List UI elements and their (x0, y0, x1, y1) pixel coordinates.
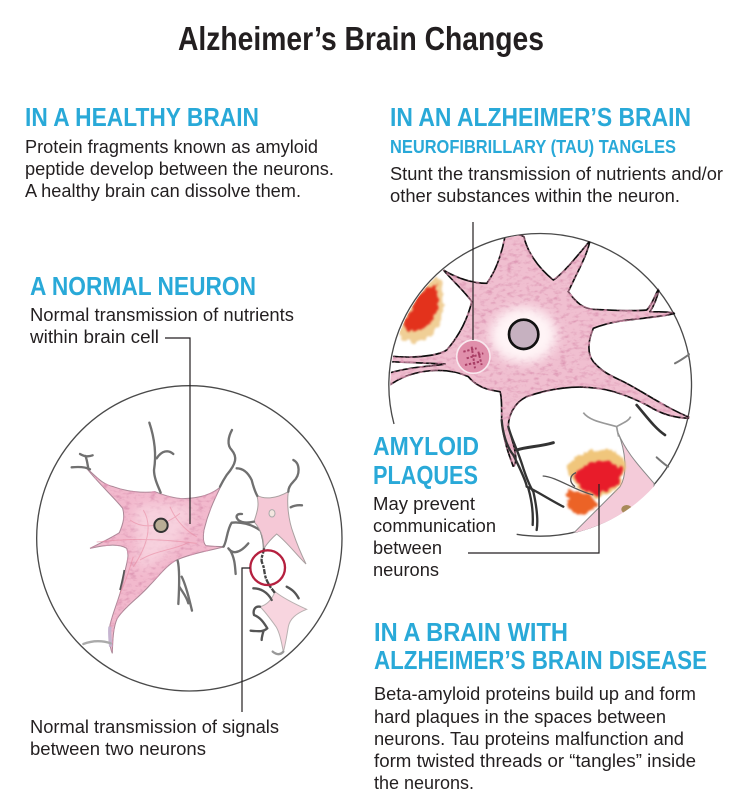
body: disease description: the neurons. (374, 773, 474, 793)
body: healthy brain description: Protein fragments known as amyloid (25, 137, 318, 157)
text block: amyloid plaques (373, 431, 496, 580)
tangle texture (463, 347, 483, 368)
nucleus (509, 320, 538, 349)
title: Alzheimer’s Brain Changes (178, 20, 544, 57)
plaque: upper left (398, 278, 444, 342)
text block: in a healthy brain (25, 102, 334, 201)
text block: a normal neuron (29, 271, 294, 347)
neuron: large healthy neuron (87, 468, 225, 653)
body: healthy brain description: A healthy brain can dissolve them. (25, 181, 301, 201)
body: normal neuron description: Normal transmission of nutrients (30, 305, 294, 325)
dendrites: lower axon branches (502, 405, 665, 530)
body: tangles description: other substances within the neuron. (390, 186, 680, 206)
neuron: upper right small neuron (254, 492, 306, 564)
circle outline (389, 234, 692, 536)
dendrite: faded grey branch (583, 413, 631, 437)
body: plaques description (373, 494, 496, 580)
body: disease description: form twisted threads or “tangles” inside (374, 751, 696, 771)
heading: amyloid plaques: AMYLOID (373, 431, 479, 461)
tangle highlight circle (457, 340, 490, 373)
dendrites: upper right neuron (237, 460, 302, 523)
text block: brain with Alzheimer's disease (374, 617, 707, 793)
body: healthy brain description: peptide develop between the neurons. (25, 159, 334, 179)
body: plaques description: neurons (373, 560, 439, 580)
heading: in a healthy brain: IN A HEALTHY BRAIN (25, 102, 259, 132)
dendrites: large neuron (72, 423, 264, 644)
red synapse circle (250, 550, 285, 585)
body: healthy brain description (25, 137, 334, 201)
body: plaques description: between (373, 538, 442, 558)
leader: synapse line (242, 568, 250, 712)
body: disease description: Beta-amyloid proteins build up and form (374, 684, 696, 704)
caption: transmission of signals: Normal transmission of signals (30, 717, 279, 737)
body: disease description: neurons. Tau proteins malfunction and (374, 729, 684, 749)
marks: faded edge strokes (657, 353, 692, 467)
body: disease description (374, 684, 696, 793)
caption: transmission of signals (30, 717, 279, 759)
text block: in an Alzheimer's brain (390, 102, 723, 206)
body: tangles description: Stunt the transmission of nutrients and/or (390, 164, 723, 184)
body: normal neuron description: within brain cell (29, 327, 159, 347)
heading: a normal neuron: A NORMAL NEURON (30, 271, 256, 301)
heading: brain with Alzheimer's disease (374, 617, 707, 675)
body: normal neuron description (29, 305, 294, 347)
illustration: Alzheimer's neuron circle (388, 234, 692, 536)
illustration: normal neurons circle (37, 386, 342, 691)
neuron: lower right faded neuron (573, 433, 654, 533)
heading: amyloid plaques (373, 431, 479, 490)
subheading: tau tangles: NEUROFIBRILLARY (TAU) TANGLES (390, 137, 676, 157)
heading: amyloid plaques: PLAQUES (373, 460, 478, 490)
neuron: tangled neuron body (388, 234, 692, 467)
plaque: lower right (543, 450, 625, 514)
leader: tangle line (472, 222, 474, 340)
leader: neuron body line (165, 338, 190, 524)
synapse: connecting dendrites (262, 548, 275, 593)
body: plaques description: May prevent (373, 494, 475, 514)
nucleus (154, 519, 168, 532)
heading: in an Alzheimer's brain: IN AN ALZHEIMER’S BRAIN (390, 102, 691, 132)
body: tangles description (390, 164, 723, 206)
heading: brain with Alzheimer's disease: IN A BRAIN WITH (374, 617, 568, 647)
dendrites: lower right neuron (251, 587, 299, 654)
heading: brain with Alzheimer's disease: ALZHEIMER’S BRAIN DISEASE (374, 645, 707, 675)
leader: plaque line (468, 484, 599, 553)
body: plaques description: communication (373, 516, 496, 536)
circle outline (37, 386, 342, 691)
neuron: lower right small neuron (260, 592, 307, 652)
caption: transmission of signals: between two neurons (30, 739, 206, 759)
body: disease description: hard plaques in the spaces between (374, 707, 666, 727)
